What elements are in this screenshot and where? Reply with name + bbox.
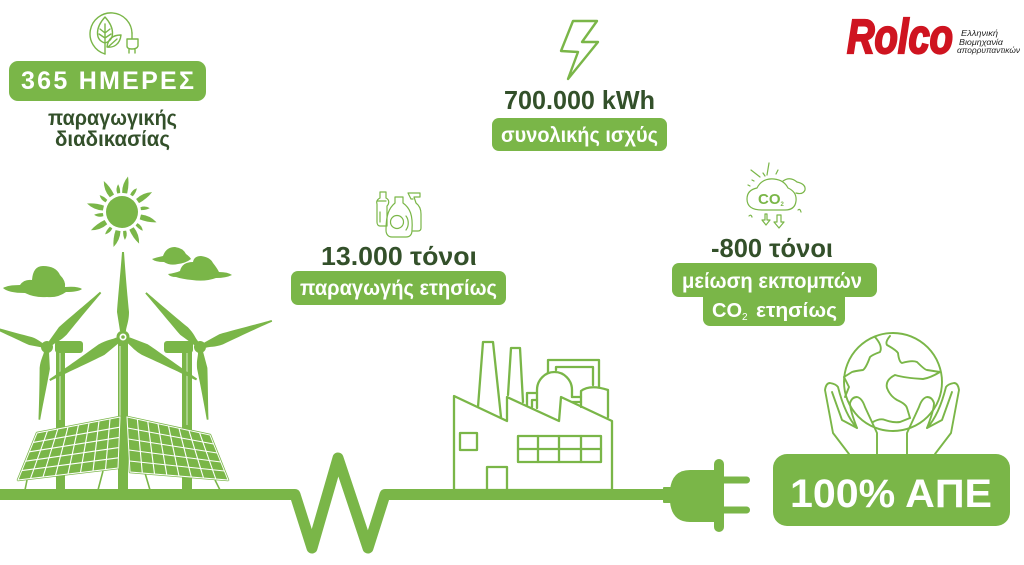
logo: Rolco: Rolco [847,11,953,64]
icon: CO2 cloud [747,163,805,228]
badge: annual production [291,271,506,305]
stat: 13.000 tons: 13.000 τόνοι [321,241,477,271]
badge: 100% renewable: 100% ΑΠΕ [790,472,992,516]
stat: -800 tons: -800 τόνοι [711,233,833,263]
illustration: wind turbines [0,252,274,490]
illustration: solar panels [18,417,228,490]
badge: 365 days [9,61,206,101]
icon: CO2 cloud: 2 [780,202,784,208]
icon: leaf and plug [90,13,138,54]
stat: 700.000 kWh: 700.000 kWh [504,85,655,115]
logo: Rolco: Ελληνική [961,28,998,38]
icon: hands holding globe [825,333,959,454]
power line with zigzag [0,458,668,548]
icon: electric plug [663,459,750,532]
badge: CO2 emissions reduction [672,263,877,326]
logo: Rolco: απορρυπαντικών [957,45,1021,55]
badge: 365 days: 365 ΗΜΕΡΕΣ [21,67,194,95]
badge: CO2 emissions reduction: CO [712,300,742,322]
text: production process: διαδικασίας [55,128,170,151]
icon: sun [86,176,158,248]
text: production process [48,107,177,151]
badge: CO2 emissions reduction: 2 [742,312,748,323]
logo: Rolco: Βιομηχανία [959,37,1004,47]
illustration: factory [454,342,612,490]
badge: CO2 emissions reduction: μείωση εκπομπών [682,270,862,293]
badge: CO2 emissions reduction: ετησίως [756,300,837,322]
icon: detergent bottles [377,192,421,237]
text: production process: παραγωγικής [48,107,177,130]
badge: annual production: παραγωγής ετησίως [300,277,497,300]
badge: total power: συνολικής ισχύς [501,124,658,147]
icon: lightning bolt [561,21,598,79]
icon: clouds [3,247,232,297]
badge: total power [492,118,667,151]
badge: 100% renewable [773,454,1010,526]
icon: CO2 cloud: CO [758,191,780,208]
